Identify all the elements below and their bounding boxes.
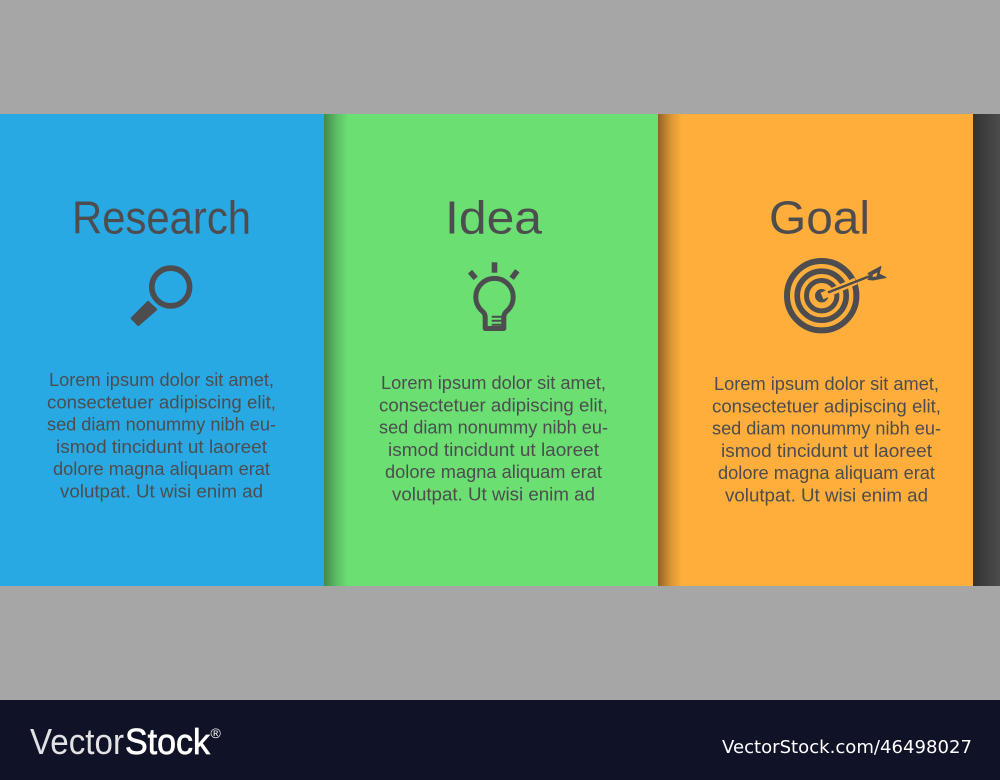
text: idea body: ismod tincidunt ut laoreet <box>388 439 599 460</box>
logo: VectorStock: Stock <box>125 721 211 762</box>
text: research body: sed diam nonummy nibh eu- <box>47 414 276 435</box>
panel: dark edge <box>973 114 1000 586</box>
text: goal body <box>712 373 941 506</box>
icon: light bulb <box>470 262 517 328</box>
text: research body: volutpat. Ut wisi enim ad <box>60 480 263 502</box>
text: research body: consectetuer adipiscing elit, <box>47 391 276 412</box>
text: goal body: ismod tincidunt ut laoreet <box>721 440 932 461</box>
logo: VectorStock: Vector <box>30 721 124 762</box>
text: goal body: Lorem ipsum dolor sit amet, <box>714 373 939 394</box>
text: research body <box>47 369 276 502</box>
panel: goal <box>658 114 973 586</box>
panel: idea <box>324 114 658 586</box>
text: goal body: volutpat. Ut wisi enim ad <box>725 484 928 506</box>
icon: magnifying glass <box>132 268 190 324</box>
text: idea body <box>379 372 608 504</box>
footer id: VectorStock.com/46498027 <box>722 737 972 758</box>
heading: idea: Idea <box>445 192 542 244</box>
logo: registered mark: ® <box>210 725 222 741</box>
logo: VectorStock <box>30 721 211 762</box>
text: idea body: consectetuer adipiscing elit, <box>379 394 608 415</box>
text: goal body: dolore magna aliquam erat <box>718 462 935 483</box>
icon: target with arrow <box>787 261 886 330</box>
heading: goal: Goal <box>769 192 870 244</box>
text: research body: ismod tincidunt ut laoreet <box>56 436 267 457</box>
text: idea body: dolore magna aliquam erat <box>385 461 602 482</box>
text: research body: dolore magna aliquam erat <box>53 458 270 479</box>
text: idea body: volutpat. Ut wisi enim ad <box>392 484 595 504</box>
heading: research: Research <box>72 192 251 244</box>
text: research body: Lorem ipsum dolor sit amet, <box>49 369 274 390</box>
text: goal body: sed diam nonummy nibh eu- <box>712 418 941 439</box>
text: idea body: sed diam nonummy nibh eu- <box>379 417 608 438</box>
text: goal body: consectetuer adipiscing elit, <box>712 395 941 416</box>
text: idea body: Lorem ipsum dolor sit amet, <box>381 372 606 393</box>
panel: research <box>0 114 324 586</box>
footer bar <box>0 700 1000 780</box>
